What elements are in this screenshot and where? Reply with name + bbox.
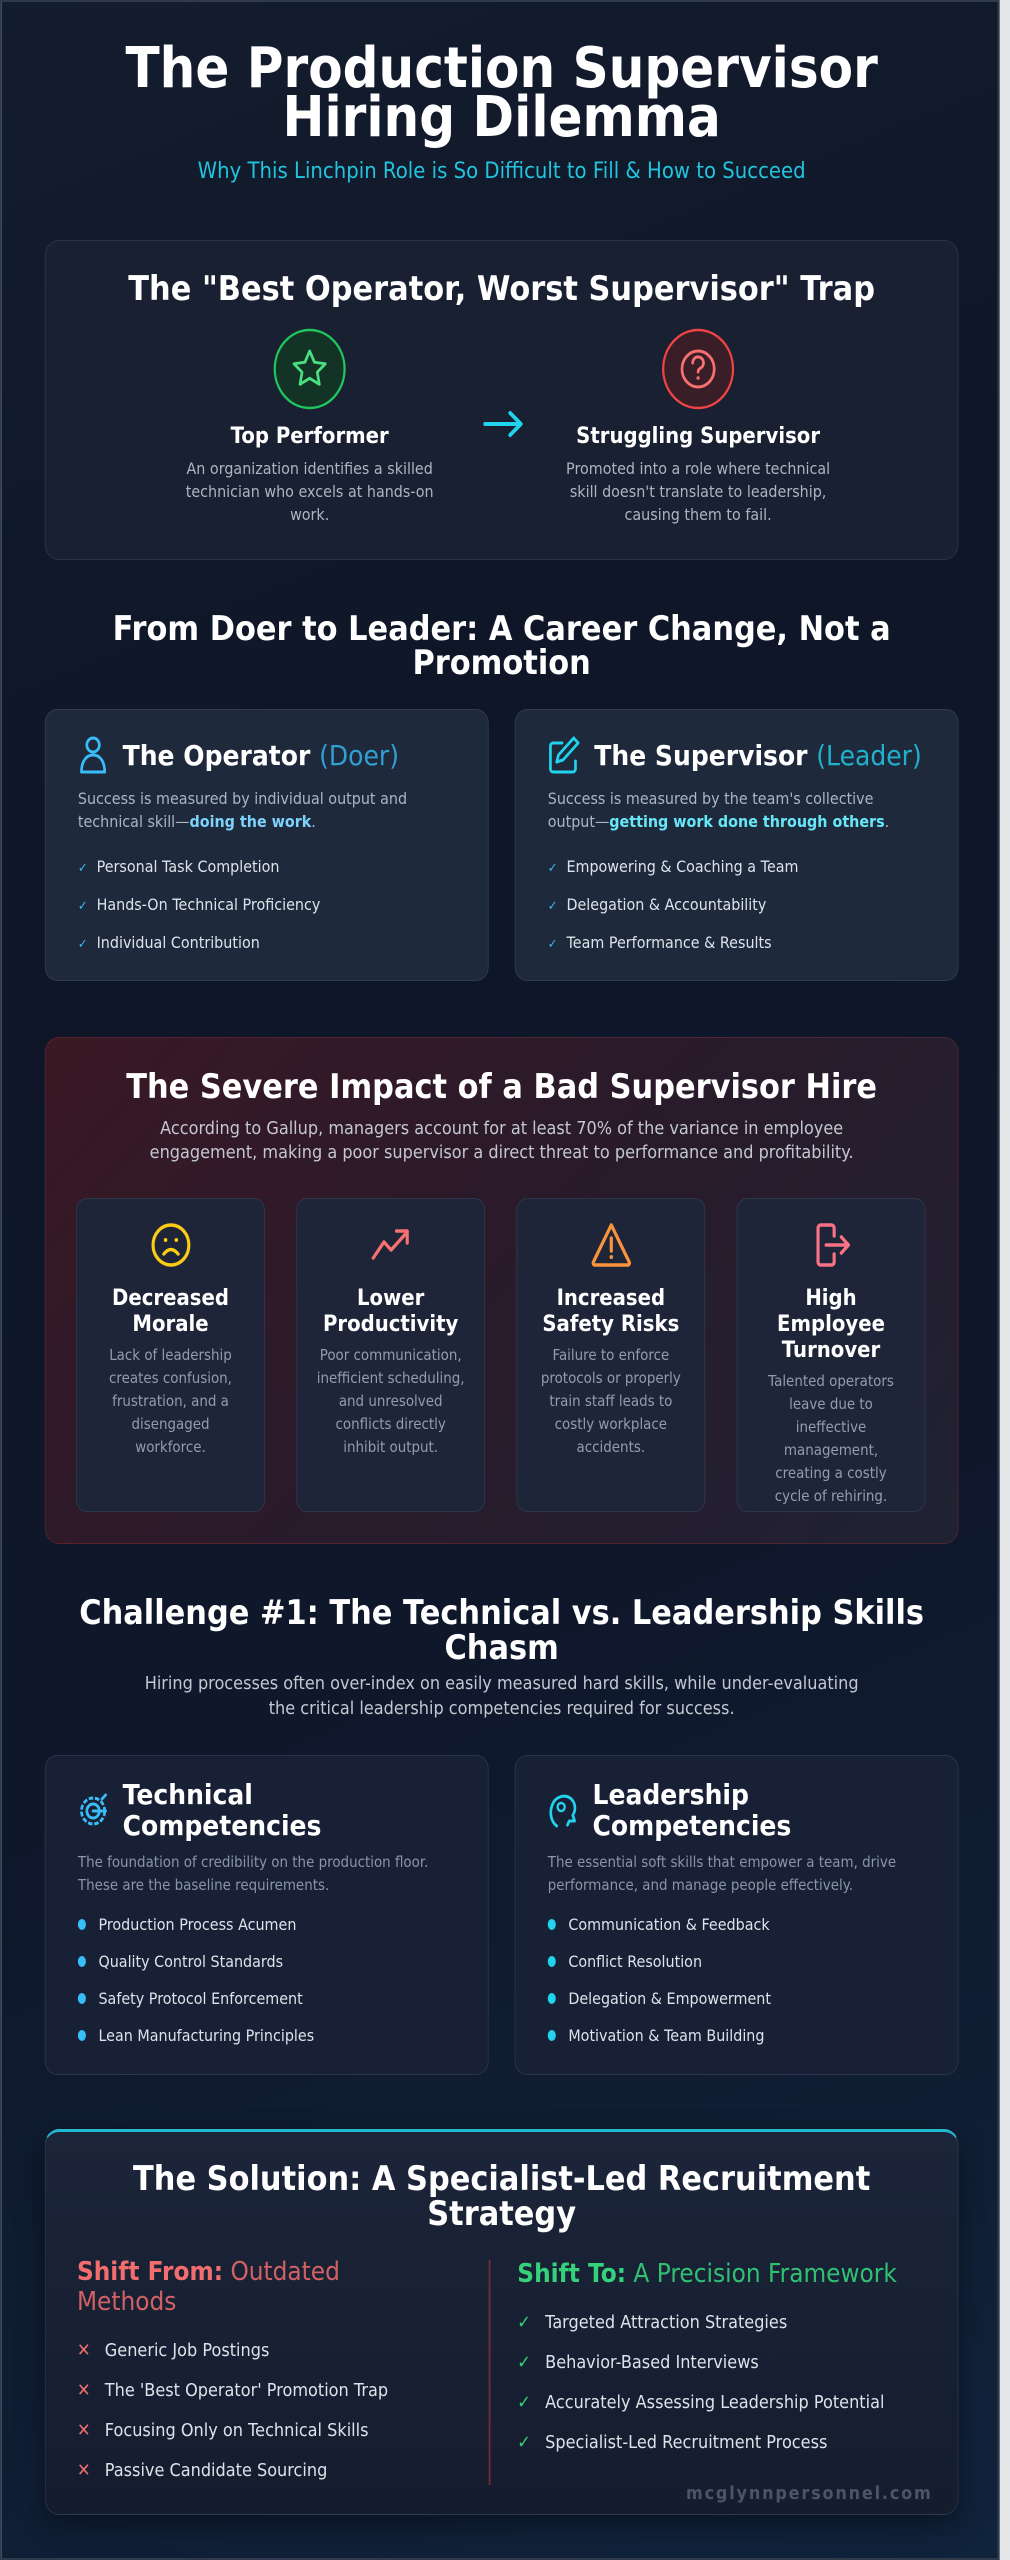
card title: leadership: Leadership bbox=[592, 1778, 749, 1811]
heading: doer to leader: From Doer to Leader: A Career Change, Not a bbox=[113, 609, 891, 649]
subtitle: Why This Linchpin Role is So Difficult to Fill & How to Succeed bbox=[198, 159, 806, 184]
heading: solution: Strategy bbox=[427, 2194, 576, 2234]
list: technical: Production Process Acumen bbox=[98, 1915, 296, 1934]
heading: trap: The "Best Operator, Worst Supervisor" Trap bbox=[128, 269, 875, 309]
column: shift from: ✕ The 'Best Operator' Promotion Trap bbox=[77, 2380, 388, 2401]
panel: solution bbox=[45, 2129, 959, 2515]
list: leadership: Delegation & Empowerment bbox=[568, 1989, 771, 2008]
list: technical bbox=[78, 1915, 314, 2045]
column: shift to: ✓ Accurately Assessing Leadership Potential bbox=[517, 2392, 884, 2413]
list: leadership: Conflict Resolution bbox=[568, 1952, 702, 1971]
heading: challenge 1: Chasm bbox=[444, 1628, 559, 1668]
description: performance, and manage people effectively. bbox=[548, 1876, 853, 1894]
column: shift to: Shift To: A Precision Framework bbox=[517, 2259, 897, 2289]
paragraph: challenge: the critical leadership competencies required for success. bbox=[269, 1698, 735, 1719]
heading: impact: The Severe Impact of a Bad Supervisor Hire bbox=[126, 1067, 877, 1107]
list: operator traits bbox=[78, 857, 320, 952]
column: shift from: Methods bbox=[77, 2287, 176, 2317]
list: supervisor traits bbox=[548, 857, 798, 952]
card title: technical: Technical bbox=[123, 1778, 253, 1811]
column: shift to: ✓ Behavior-Based Interviews bbox=[517, 2352, 759, 2373]
list: supervisor traits: ✓ Delegation & Accountability bbox=[548, 895, 766, 914]
paragraph: gallup: According to Gallup, managers account for at least 70% of the variance in employee bbox=[160, 1118, 843, 1139]
column: shift from: ✕ Focusing Only on Technical Skills bbox=[77, 2420, 369, 2441]
item: top performer bbox=[186, 328, 434, 524]
description: technical skill—doing the work. bbox=[78, 812, 316, 831]
column: shift to: ✓ Targeted Attraction Strategies bbox=[517, 2312, 787, 2333]
icon: exit bbox=[816, 1223, 850, 1267]
card: productivity bbox=[296, 1198, 485, 1512]
description bbox=[548, 789, 889, 831]
list: technical: Safety Protocol Enforcement bbox=[98, 1989, 303, 2008]
description: The essential soft skills that empower a team, drive bbox=[548, 1853, 896, 1871]
heading: challenge 1 bbox=[79, 1593, 924, 1668]
card: turnover: Turnover bbox=[782, 1338, 880, 1363]
title bbox=[125, 36, 878, 150]
card title: technical bbox=[80, 1778, 321, 1842]
column: shift from bbox=[77, 2257, 388, 2481]
column: shift to: ✓ Specialist-Led Recruitment Process bbox=[517, 2432, 827, 2453]
card: supervisor bbox=[515, 709, 959, 981]
description: Success is measured by individual output and bbox=[78, 789, 407, 808]
card: safety bbox=[516, 1198, 705, 1512]
list: operator traits: ✓ Individual Contribution bbox=[78, 933, 260, 952]
list: supervisor traits: ✓ Team Performance & Results bbox=[548, 933, 772, 952]
card: safety: Safety Risks bbox=[542, 1312, 679, 1337]
heading: doer to leader: Promotion bbox=[412, 643, 591, 683]
card title: technical: Competencies bbox=[123, 1809, 321, 1842]
description: output—getting work done through others. bbox=[548, 812, 889, 831]
card: turnover: Employee bbox=[777, 1312, 885, 1337]
icon: frown bbox=[152, 1223, 190, 1267]
card: productivity: Lower bbox=[357, 1286, 424, 1311]
list: supervisor traits: ✓ Empowering & Coaching a Team bbox=[548, 857, 798, 876]
panel: severe impact bbox=[45, 1037, 959, 1544]
card: morale bbox=[76, 1198, 265, 1512]
list: leadership bbox=[548, 1915, 771, 2045]
icon: trend bbox=[372, 1229, 409, 1260]
heading: doer to leader bbox=[113, 609, 891, 683]
card: morale: Decreased bbox=[112, 1286, 229, 1311]
panel: best operator trap bbox=[45, 240, 959, 560]
card: productivity: Productivity bbox=[323, 1312, 458, 1337]
paragraph: challenge bbox=[145, 1673, 859, 1719]
list: leadership: Motivation & Team Building bbox=[568, 2026, 764, 2045]
footer: website: mcglynnpersonnel.com bbox=[686, 2483, 933, 2504]
description: These are the baseline requirements. bbox=[78, 1876, 329, 1894]
list: technical: Lean Manufacturing Principles bbox=[98, 2026, 314, 2045]
arrow bbox=[483, 410, 523, 438]
card title: supervisor: The Supervisor (Leader) bbox=[594, 738, 922, 772]
card: technical competencies bbox=[45, 1755, 489, 2075]
heading: solution: The Solution: A Specialist-Led Recruitment bbox=[133, 2159, 870, 2199]
column: shift to bbox=[517, 2259, 897, 2453]
list: operator traits: ✓ Personal Task Completion bbox=[78, 857, 279, 876]
divider bbox=[489, 2260, 490, 2485]
paragraph: gallup bbox=[150, 1118, 854, 1163]
card: operator bbox=[45, 709, 489, 981]
heading: solution bbox=[133, 2159, 870, 2234]
column: shift from: ✕ Passive Candidate Sourcing bbox=[77, 2460, 327, 2481]
item: struggling supervisor: Promoted into a role where technical skill doesn't translate to leadership, causing them to fail. bbox=[566, 459, 830, 524]
description bbox=[548, 1853, 896, 1894]
card: turnover bbox=[737, 1198, 925, 1512]
list: operator traits: ✓ Hands-On Technical Proficiency bbox=[78, 895, 320, 914]
description: The foundation of credibility on the production floor. bbox=[78, 1853, 428, 1871]
description: Success is measured by the team's collective bbox=[548, 789, 873, 808]
item: struggling supervisor: Struggling Supervisor bbox=[576, 424, 820, 449]
title: Hiring Dilemma bbox=[283, 85, 721, 150]
item: top performer: An organization identifies a skilled technician who excels at hands-on work. bbox=[186, 459, 434, 524]
column: shift from: Shift From: Outdated bbox=[77, 2257, 340, 2287]
card: safety: Increased bbox=[557, 1286, 665, 1311]
heading: challenge 1: Challenge #1: The Technical vs. Leadership Skills bbox=[79, 1593, 924, 1633]
title: The Production Supervisor bbox=[125, 36, 878, 101]
list: leadership: Communication & Feedback bbox=[568, 1915, 770, 1934]
paragraph: gallup: engagement, making a poor supervisor a direct threat to performance and profitability. bbox=[150, 1142, 854, 1163]
description bbox=[78, 789, 407, 831]
card: safety: Failure to enforce protocols or properly train staff leads to costly workplace accidents. bbox=[541, 1346, 681, 1456]
icon: question bbox=[662, 328, 734, 410]
card: turnover: Talented operators leave due to ineffective management, creating a costly cycle of rehiring. bbox=[768, 1372, 894, 1505]
icon: warning bbox=[592, 1223, 631, 1267]
card title: operator: The Operator (Doer) bbox=[123, 738, 399, 772]
card: leadership competencies bbox=[515, 1755, 959, 2075]
card title: leadership: Competencies bbox=[592, 1809, 791, 1842]
impact cards bbox=[76, 1198, 926, 1512]
description bbox=[78, 1853, 428, 1894]
column: shift from: ✕ Generic Job Postings bbox=[77, 2340, 269, 2361]
list: technical: Quality Control Standards bbox=[98, 1952, 283, 1971]
card title: leadership bbox=[549, 1778, 791, 1842]
card: productivity: Poor communication, inefficient scheduling, and unresolved conflicts directly inhibit output. bbox=[317, 1346, 465, 1456]
item: top performer: Top Performer bbox=[231, 424, 389, 449]
card: morale: Lack of leadership creates confusion, frustration, and a disengaged workforce. bbox=[109, 1346, 232, 1456]
card: turnover: High bbox=[805, 1286, 857, 1311]
item: struggling supervisor bbox=[566, 328, 830, 524]
card: morale: Morale bbox=[132, 1312, 209, 1337]
paragraph: challenge: Hiring processes often over-index on easily measured hard skills, while under-evaluating bbox=[145, 1673, 859, 1694]
icon: star bbox=[274, 328, 346, 410]
